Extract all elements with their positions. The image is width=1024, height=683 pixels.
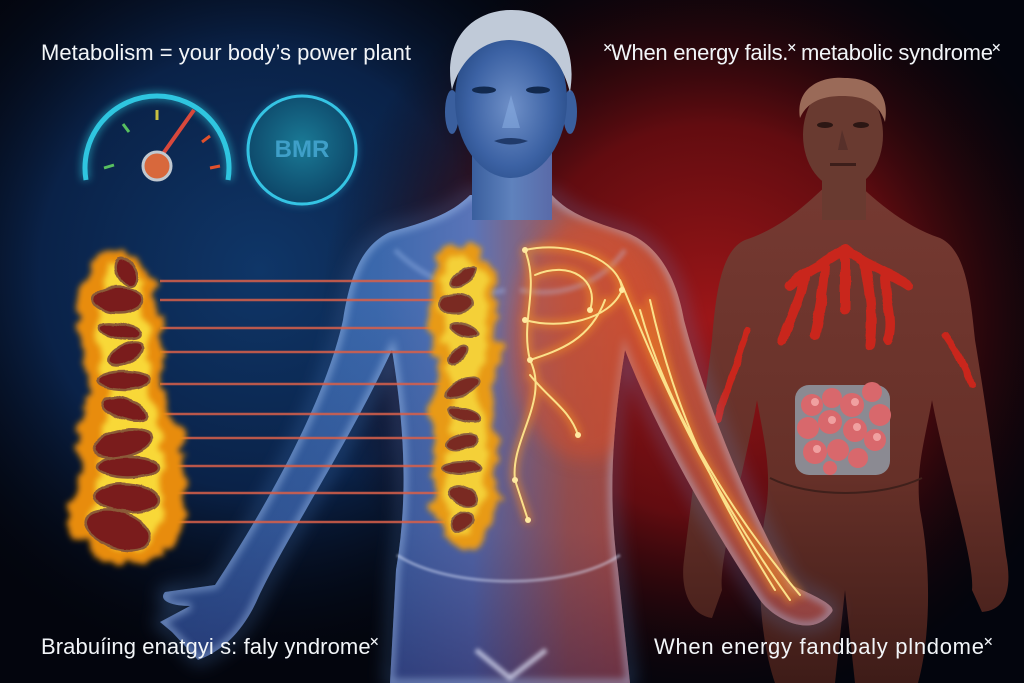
right figure: metabolic syndrome body — [683, 78, 1008, 683]
gauge icon — [85, 96, 229, 180]
right figure abdomen: fat cluster — [795, 382, 891, 475]
central figure head — [445, 10, 577, 220]
BMR badge: BMR — [275, 136, 329, 163]
central figure glow — [160, 195, 833, 683]
heading: top right: ˟When energy fails.˟ metabolic syndrome˟ — [604, 40, 1001, 65]
glowing nerve network: chest and arm — [512, 247, 800, 600]
heading: top left: Metabolism = your body’s power plant — [41, 40, 411, 65]
BMR badge — [246, 94, 358, 206]
caption: bottom left: Brabuíing enatgyi s: faly yndrome˟ — [41, 634, 379, 659]
flaming organ column: body — [432, 244, 499, 547]
right figure veins — [718, 248, 972, 420]
caption: bottom right: When energy fandbaly plndome˟ — [654, 634, 993, 659]
flaming organ column: left — [65, 250, 187, 564]
central figure body — [160, 195, 833, 683]
horizontal energy lines — [160, 281, 445, 522]
